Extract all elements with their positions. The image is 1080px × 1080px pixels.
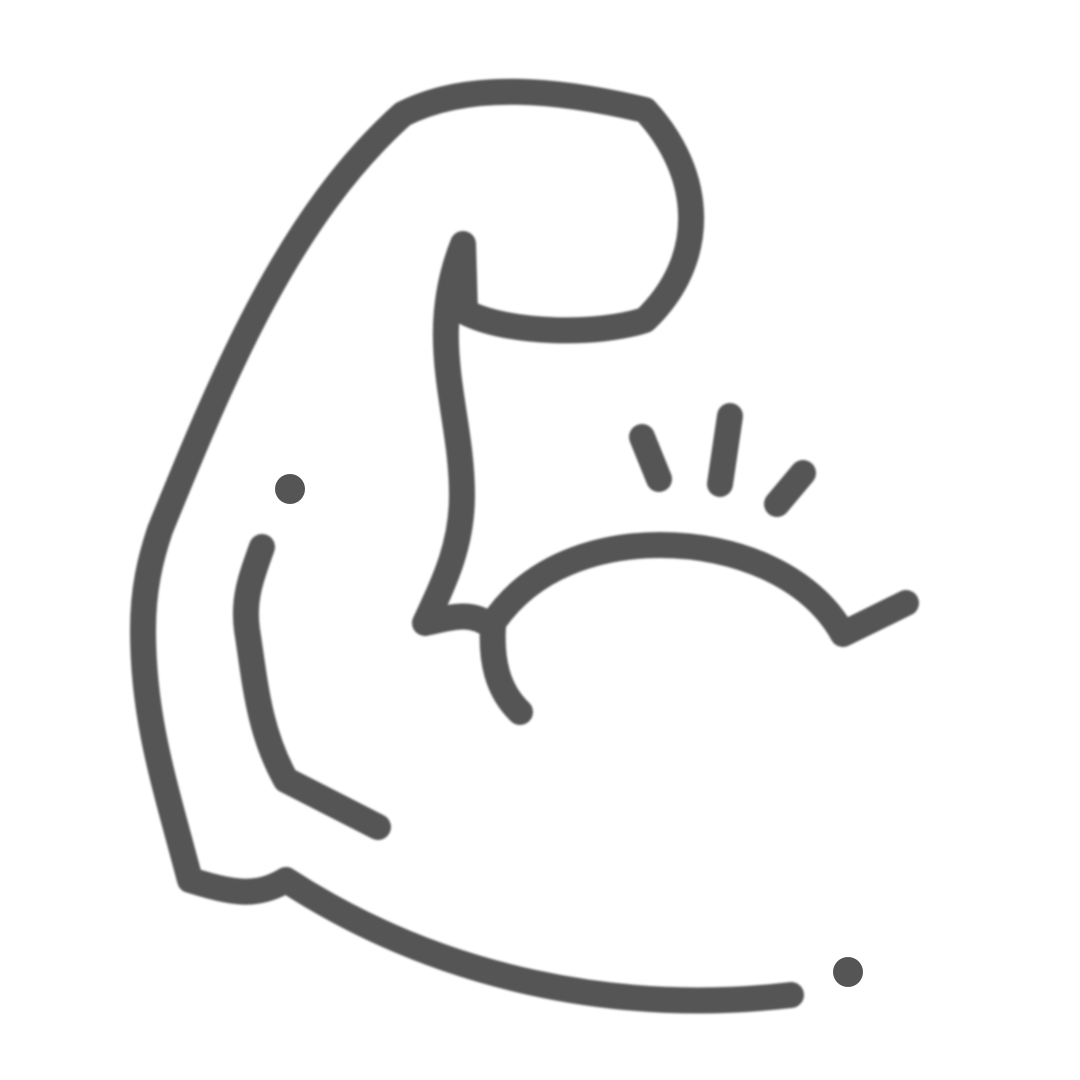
flex mark middle bbox=[720, 416, 730, 484]
tricep crease bbox=[246, 547, 378, 827]
elbow crease bbox=[493, 626, 520, 712]
dot near forearm bbox=[833, 957, 863, 987]
flex mark right bbox=[777, 473, 803, 504]
flex mark left bbox=[642, 437, 659, 479]
arm outline bbox=[143, 92, 906, 1000]
dot near tricep bbox=[275, 474, 305, 504]
